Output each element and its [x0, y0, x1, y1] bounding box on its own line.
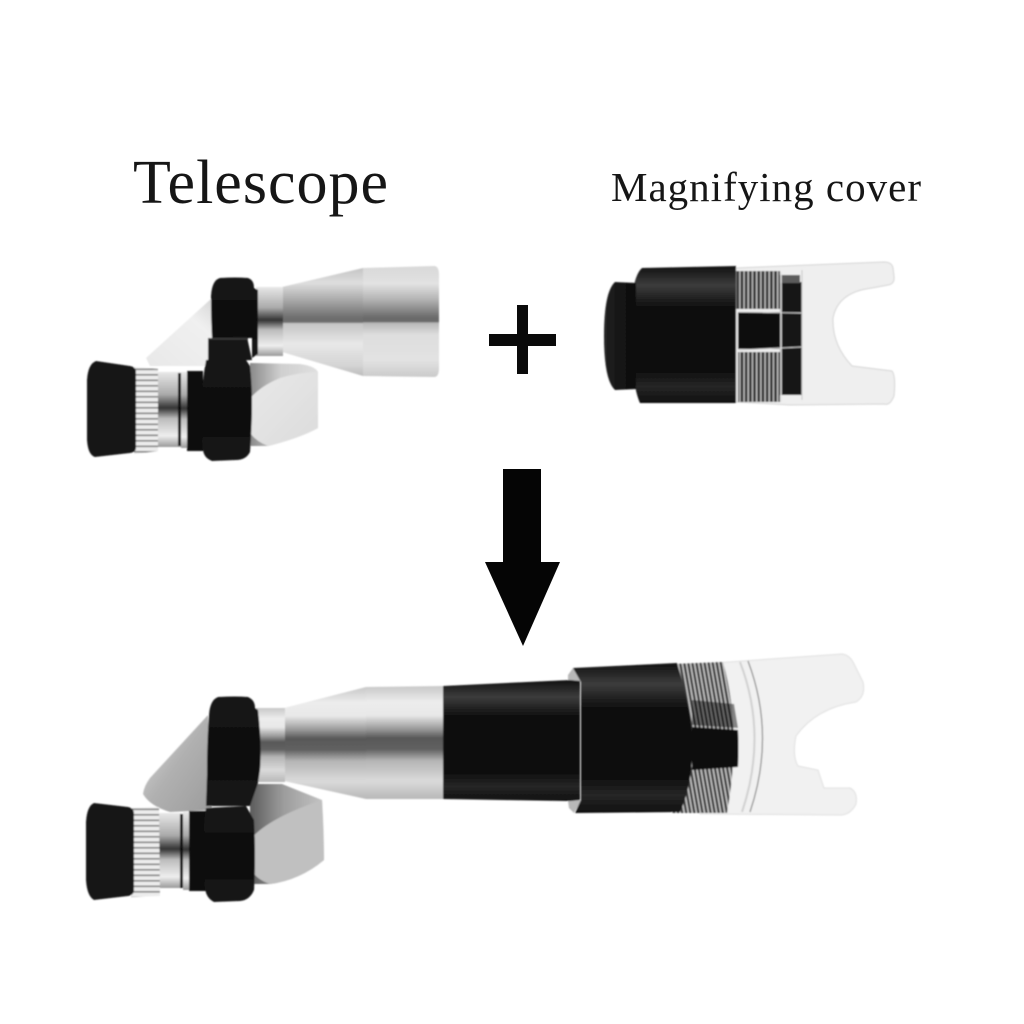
objective barrel	[363, 266, 439, 377]
dark thread shade	[692, 700, 738, 728]
thread band bottom	[738, 352, 780, 402]
rubber eyecup	[87, 361, 136, 457]
dark centre window	[692, 727, 738, 770]
lower silver block	[250, 363, 318, 446]
clear ring arc	[748, 661, 763, 812]
black body	[632, 266, 736, 403]
lower black ring	[201, 359, 252, 461]
icon: plus sign	[489, 305, 556, 374]
eyepiece shaft	[156, 372, 182, 447]
black cover body	[573, 663, 693, 813]
silver flange	[568, 668, 582, 813]
dark centre window	[738, 312, 780, 349]
black knob	[604, 282, 636, 390]
icon: magnifying cover product photo	[604, 262, 895, 405]
icon: assembled telescope with cover	[86, 654, 864, 902]
thread band top	[736, 271, 780, 309]
diagonal prism housing	[146, 298, 224, 366]
eyepiece shaft	[158, 813, 182, 888]
upper black ring	[211, 278, 258, 358]
rubber eyecup	[86, 803, 134, 900]
heading: Magnifying cover: Magnifying cover	[611, 164, 921, 210]
lower silver block	[250, 784, 324, 884]
cone section	[282, 268, 363, 376]
silver barrel	[366, 686, 444, 799]
upper black ring	[206, 696, 261, 806]
knurled focus wheel	[131, 807, 160, 897]
neck	[256, 708, 285, 782]
knurled focus wheel	[134, 367, 158, 454]
thread band	[672, 662, 734, 813]
clamp link	[208, 337, 252, 362]
lower black ring	[203, 806, 255, 902]
neck	[256, 287, 283, 356]
black extension tube	[443, 680, 580, 801]
diagonal prism housing	[143, 715, 212, 812]
arrow: down	[485, 469, 560, 646]
cone section	[284, 687, 366, 799]
icon: telescope product photo	[87, 266, 439, 461]
transparent cup	[700, 654, 864, 815]
transparent cup	[736, 262, 895, 405]
heading: Telescope: Telescope	[133, 149, 388, 217]
inner dark tube	[780, 282, 802, 395]
